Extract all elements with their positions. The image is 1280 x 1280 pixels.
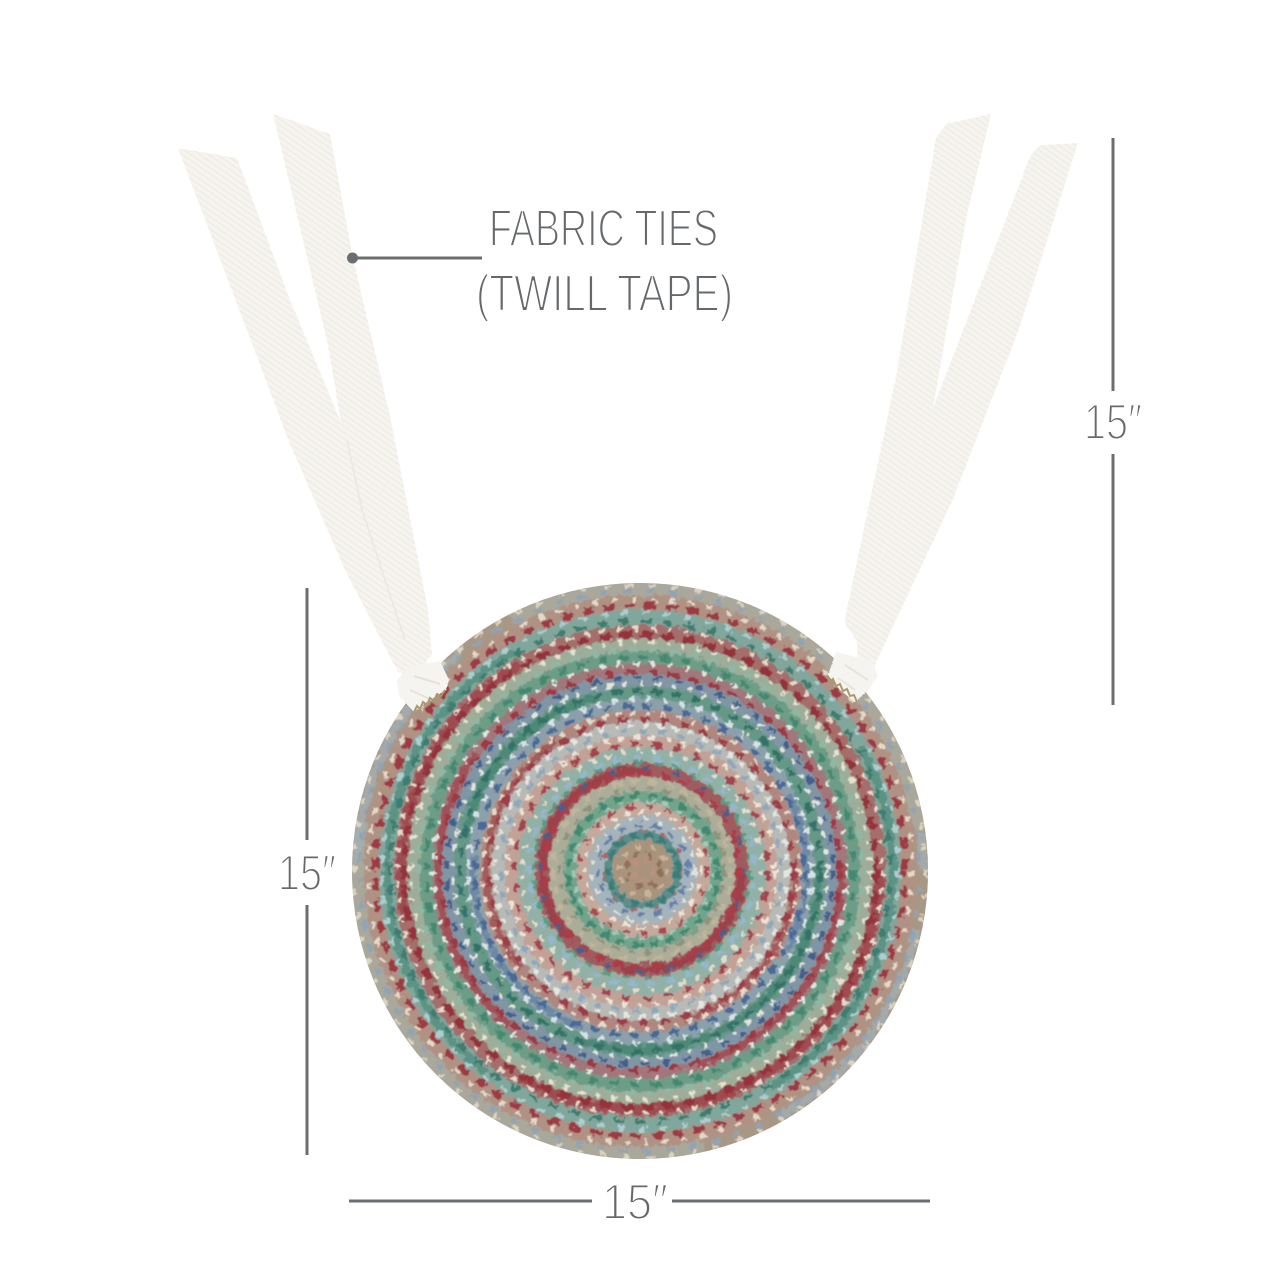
tie: inner right strap (845, 114, 991, 640)
left zigzag stitch (414, 690, 445, 712)
callout text: fabric ties: FABRIC TIES (489, 200, 718, 258)
tie: inner left strap (273, 114, 432, 668)
tie: far left strap (178, 148, 428, 680)
right zigzag stitch (826, 676, 857, 702)
dimension: pad height 15 inches: 15″ (278, 845, 336, 901)
braided round pad (352, 583, 928, 1159)
large colour shifts (357, 588, 923, 1154)
bases, outer to inner (357, 588, 923, 1154)
callout text: fabric ties: (TWILL TAPE) (476, 265, 733, 323)
strand flecks: middle bands (483, 713, 799, 1029)
infographic: braided round chair pad with dimensions (178, 114, 1140, 1218)
strand flecks: outer bands (354, 585, 926, 1157)
left fabric ties (178, 114, 449, 712)
right fabric ties (828, 114, 1078, 702)
dimension: pad width 15 inches: 15″ (602, 1174, 668, 1230)
dimension: tie length 15 inches: 15″ (1084, 394, 1142, 450)
callout: fabric ties leader line (347, 252, 482, 264)
knot (828, 652, 878, 702)
callout text: fabric ties (476, 200, 733, 323)
tie: far right strap (856, 143, 1078, 669)
strand flecks: inner bands (568, 795, 718, 945)
knot (397, 661, 449, 712)
crease between straps (347, 440, 405, 640)
